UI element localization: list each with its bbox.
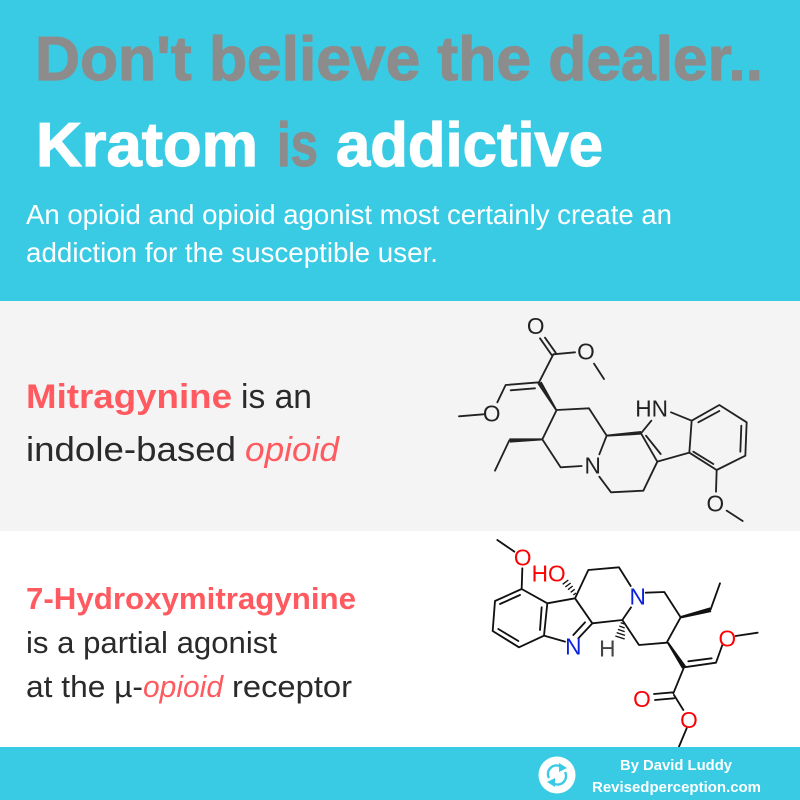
chemical structure: mitragynine: HN xyxy=(635,395,668,421)
title line 2: addictive xyxy=(336,111,603,180)
chemical structure: 7-hydroxymitragynine: HO xyxy=(532,560,566,586)
text: 7-hydroxymitragynine description: is a partial agonist xyxy=(26,625,277,660)
icon: refresh xyxy=(538,756,576,794)
text: mitragynine description: is an xyxy=(241,378,312,416)
text: 7-hydroxymitragynine description: 7-Hydroxymitragynine xyxy=(26,581,356,616)
chemical structure: mitragynine: O xyxy=(483,400,500,426)
text: mitragynine description xyxy=(26,378,340,469)
chemical structure: 7-hydroxymitragynine: N xyxy=(629,584,646,610)
panel: footer xyxy=(0,747,800,800)
title line 1: Don't believe the dealer.. xyxy=(35,25,763,94)
chemical structure: 7-hydroxymitragynine xyxy=(493,540,758,747)
footer credit xyxy=(592,757,761,796)
chemical structure: 7-hydroxymitragynine: O xyxy=(633,686,651,712)
text: mitragynine description: opioid xyxy=(245,431,340,469)
text: mitragynine description: indole-based xyxy=(26,431,236,469)
panel: mitragynine xyxy=(0,301,800,531)
text: 7-hydroxymitragynine description xyxy=(26,581,356,704)
text: 7-hydroxymitragynine description: opioid xyxy=(143,669,225,704)
hashed bonds xyxy=(563,580,625,639)
title line 2: is xyxy=(277,111,318,180)
chemical structure: mitragynine: O xyxy=(707,490,724,516)
chemical structure: mitragynine: N xyxy=(584,453,601,479)
text: 7-hydroxymitragynine description: at the µ- xyxy=(26,669,143,704)
title line 2: Kratom xyxy=(36,111,258,180)
title line 2 xyxy=(36,111,603,180)
footer credit: By David Luddy xyxy=(620,757,733,774)
chemical structure: 7-hydroxymitragynine: O xyxy=(514,544,531,570)
chemical structure: 7-hydroxymitragynine: N xyxy=(565,634,582,660)
text: mitragynine description: Mitragynine xyxy=(26,378,232,416)
footer credit: Revisedperception.com xyxy=(592,779,761,796)
chemical structure: mitragynine: O xyxy=(577,339,595,365)
panel: 7-hydroxymitragynine xyxy=(0,531,800,747)
chemical structure: 7-hydroxymitragynine: O xyxy=(680,707,698,733)
subtitle: addiction for the susceptible user. xyxy=(26,237,438,268)
chemical structure: mitragynine xyxy=(459,313,747,521)
chemical structure: 7-hydroxymitragynine: O xyxy=(719,625,736,651)
text: 7-hydroxymitragynine description: receptor xyxy=(232,669,352,704)
subtitle: An opioid and opioid agonist most certainly create an xyxy=(26,199,672,230)
chemical structure: mitragynine: O xyxy=(527,313,544,339)
panel: header xyxy=(0,0,800,301)
chemical structure: 7-hydroxymitragynine: H xyxy=(599,635,616,661)
subtitle xyxy=(26,199,672,268)
